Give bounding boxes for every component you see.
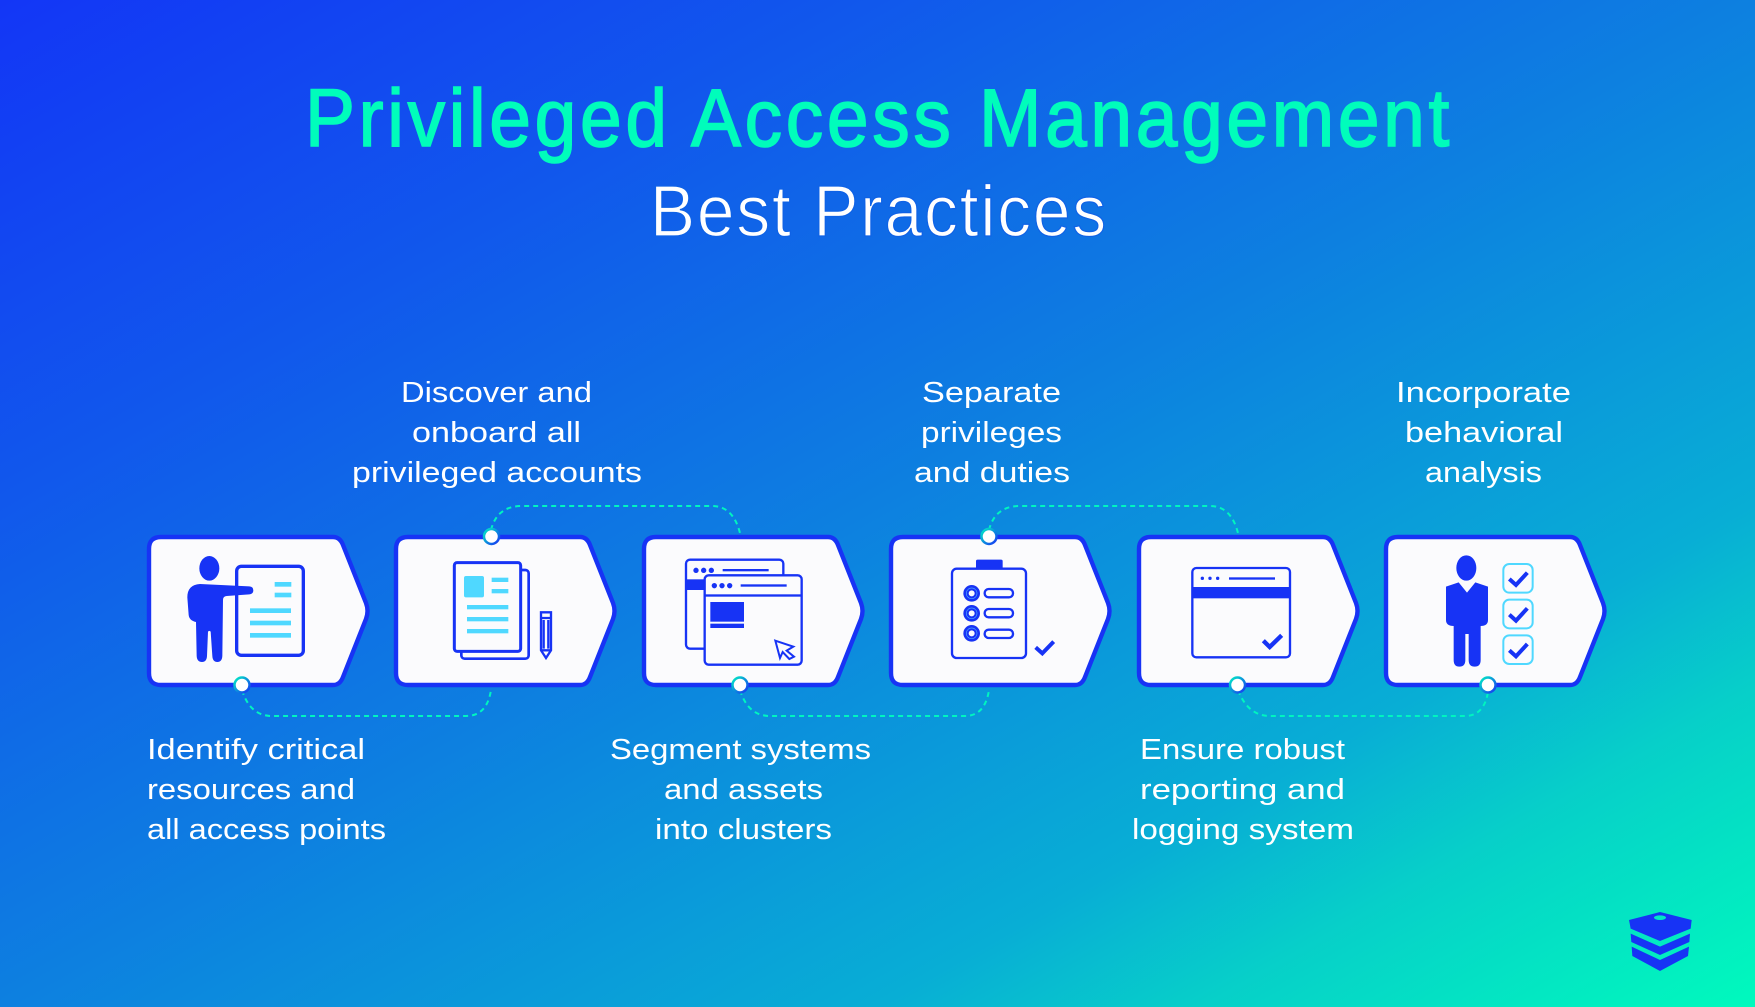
subtitle: Best Practices <box>650 172 1108 252</box>
card shape <box>891 537 1110 685</box>
caption: step 4: Separate <box>922 377 1061 409</box>
icon: browser windows and cursor <box>686 560 802 665</box>
icon: browser window with check <box>1192 568 1290 657</box>
icon: person pointing at document <box>187 556 303 662</box>
caption: step 1: Identify critical <box>147 734 365 766</box>
caption: step 6 <box>1396 377 1571 489</box>
caption: step 4 <box>914 377 1070 489</box>
node dot: step 4 <box>982 529 996 544</box>
caption: step 5: reporting and <box>1140 774 1345 806</box>
caption: step 1 <box>147 734 386 846</box>
connector: step 4 to step 5 <box>989 506 1238 533</box>
caption: step 6: behavioral <box>1405 417 1563 449</box>
caption: step 3: into clusters <box>655 814 832 846</box>
icon: logo stacked layers <box>1629 912 1692 971</box>
caption: step 3: and assets <box>664 774 823 806</box>
node dot: step 5 <box>1230 678 1245 692</box>
caption: step 3: Segment systems <box>610 734 871 766</box>
caption: step 3 <box>610 734 871 846</box>
node dot: step 1 <box>234 678 250 692</box>
caption: step 5 <box>1132 734 1354 846</box>
caption: step 5: Ensure robust <box>1140 734 1345 766</box>
card shape <box>644 537 862 685</box>
caption: step 2: Discover and <box>401 377 592 409</box>
caption: step 4: privileges <box>921 417 1062 449</box>
title: Privileged Access Management <box>305 73 1453 164</box>
caption: step 5: logging system <box>1132 814 1354 846</box>
icon: clipboard checklist <box>952 560 1054 658</box>
connector: step 5 to step 6 <box>1238 690 1488 716</box>
caption: step 2 <box>352 377 642 489</box>
panel: step 1 card <box>149 537 368 685</box>
node dot: step 2 <box>484 529 499 544</box>
icon: person with checklist <box>1446 555 1533 667</box>
card shape <box>396 537 614 685</box>
caption: step 4: and duties <box>914 457 1070 489</box>
panel: step 3 card <box>644 537 862 685</box>
panel: step 6 card <box>1386 537 1604 685</box>
node dot: step 6 <box>1480 678 1496 692</box>
connector: step 2 to step 3 <box>491 506 740 533</box>
caption: step 6: Incorporate <box>1396 377 1571 409</box>
caption: step 2: privileged accounts <box>352 457 642 489</box>
card shape <box>1386 537 1604 685</box>
caption: step 6: analysis <box>1425 457 1542 489</box>
caption: step 1: all access points <box>147 814 386 846</box>
panel: step 4 card <box>891 537 1110 685</box>
caption: step 2: onboard all <box>412 417 581 449</box>
card shape <box>149 537 368 685</box>
panel: step 5 card <box>1139 537 1358 685</box>
card shape <box>1139 537 1358 685</box>
caption: step 1: resources and <box>147 774 355 806</box>
connector: step 1 to step 2 <box>242 690 491 716</box>
connector: step 3 to step 4 <box>740 690 989 716</box>
icon: documents and pencil <box>454 563 551 659</box>
node dot: step 3 <box>732 678 748 692</box>
panel: step 2 card <box>396 537 614 685</box>
